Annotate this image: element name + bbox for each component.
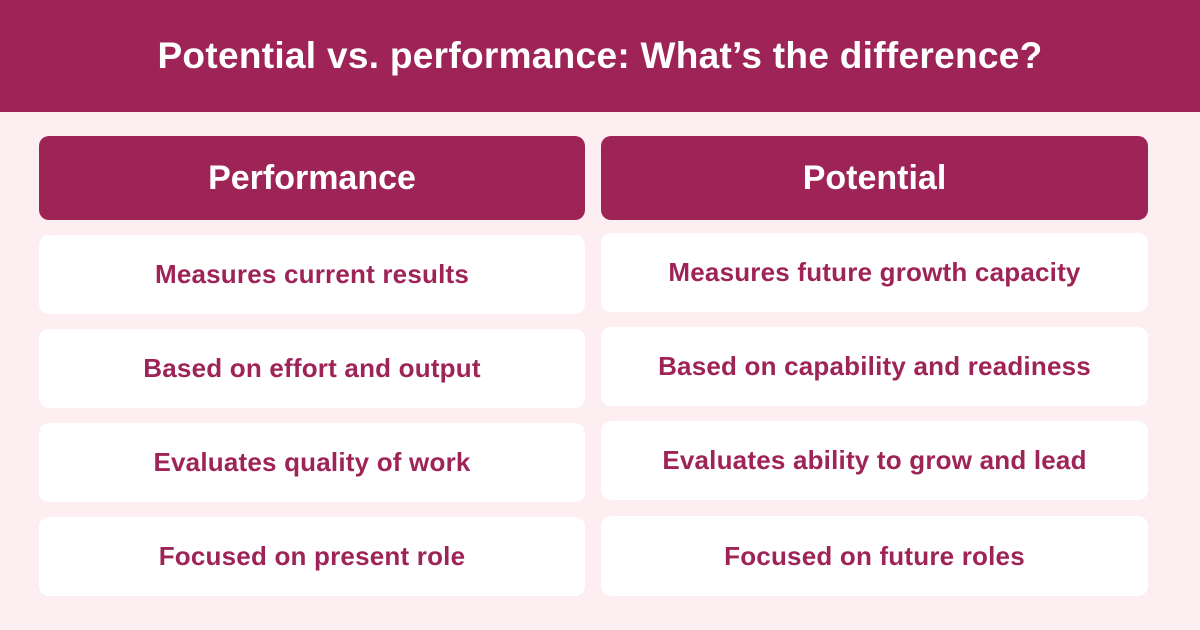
row: performance 3: Evaluates quality of work xyxy=(153,447,471,477)
row: performance 2: Based on effort and output xyxy=(143,353,481,383)
header: potential: Potential xyxy=(803,158,946,196)
header: performance: Performance xyxy=(208,158,416,196)
row: potential 2: Based on capability and readiness xyxy=(658,351,1091,381)
row: performance 1 xyxy=(39,235,585,314)
row: potential 4: Focused on future roles xyxy=(724,540,1025,570)
row: potential 2 xyxy=(601,327,1148,406)
row: performance 3 xyxy=(39,423,585,502)
header: potential xyxy=(601,136,1148,220)
title xyxy=(0,0,1200,112)
row: performance 2 xyxy=(39,329,585,408)
row: potential 1: Measures future growth capacity xyxy=(668,257,1081,287)
row: performance 4: Focused on present role xyxy=(159,541,465,571)
row: performance 1: Measures current results xyxy=(155,259,469,289)
title: Potential vs. performance: What’s the difference? xyxy=(157,35,1043,76)
row: potential 4 xyxy=(601,516,1148,596)
header: performance xyxy=(39,136,585,220)
row: potential 1 xyxy=(601,233,1148,312)
row: potential 3 xyxy=(601,421,1148,500)
row: potential 3: Evaluates ability to grow and lead xyxy=(662,445,1087,475)
row: performance 4 xyxy=(39,517,585,596)
